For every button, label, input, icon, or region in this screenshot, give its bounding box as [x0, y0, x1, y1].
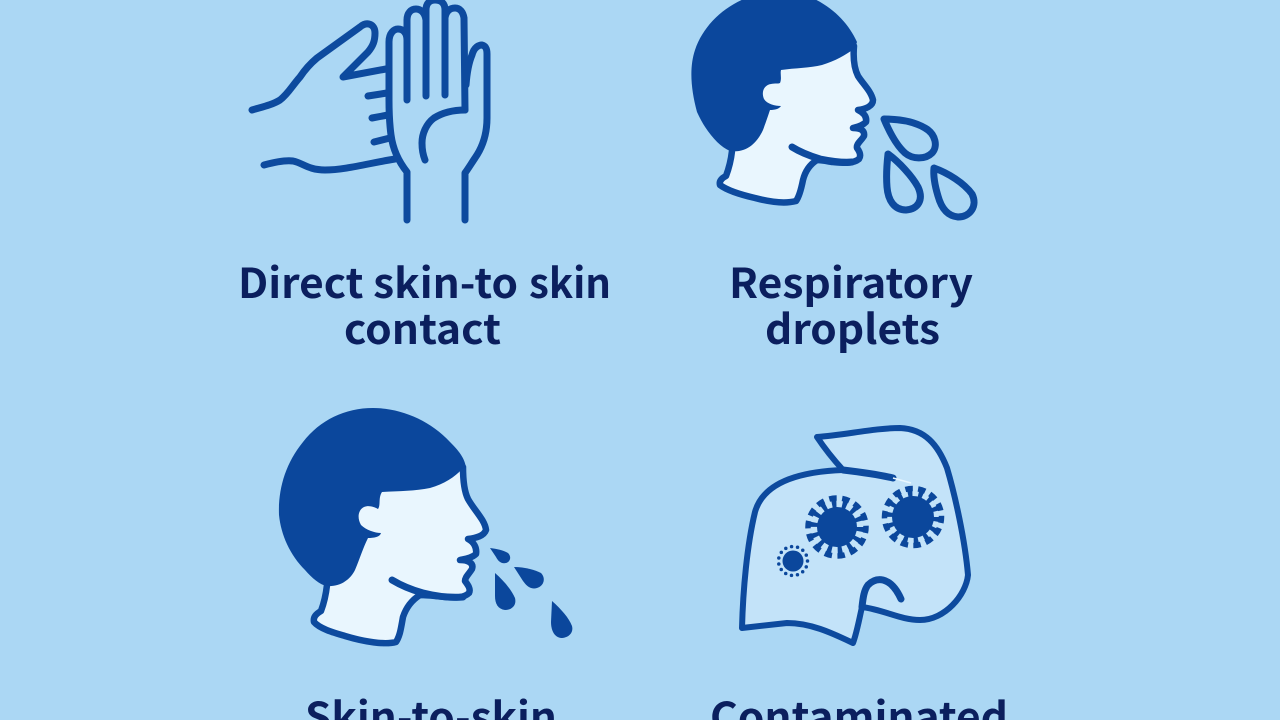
label: respiratory droplets: [729, 250, 973, 356]
label: respiratory droplets: Respiratory: [729, 250, 973, 310]
label: direct skin-to-skin contact: skin: [529, 250, 611, 310]
icon: contaminated cloth: [742, 428, 968, 643]
icon: head exhaling solid droplets: [279, 408, 572, 643]
panel: contaminated surfaces: [710, 428, 1008, 720]
panel: direct skin-to-skin contact: [238, 0, 611, 356]
panel: respiratory droplets: [691, 0, 974, 356]
label: direct skin-to-skin contact: [238, 250, 611, 356]
virus: small: [778, 546, 808, 576]
virus: large right: [884, 488, 942, 546]
label: respiratory droplets: droplets: [765, 296, 940, 356]
icon: head exhaling outlined droplets: [691, 0, 974, 217]
panel: skin-to-skin: [279, 408, 572, 720]
virus: large centre: [808, 498, 866, 556]
label: direct skin-to-skin contact: Direct skin-to: [238, 250, 518, 310]
label: direct skin-to-skin contact: contact: [344, 296, 501, 356]
icon: two touching hands: [252, 0, 487, 220]
